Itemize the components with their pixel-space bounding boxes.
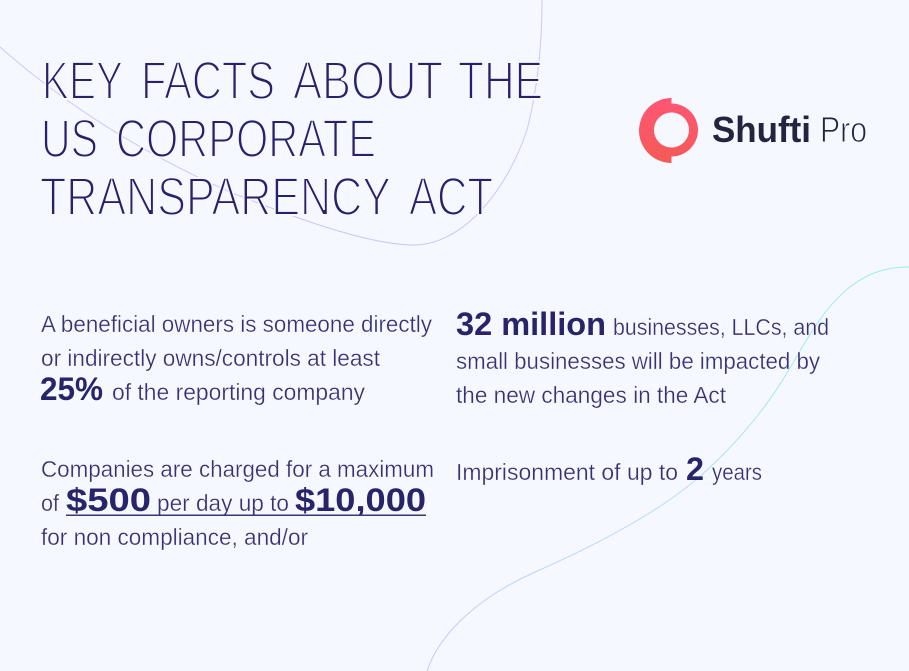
fact: fines: Companies are charged for a maximum [41,456,434,482]
icon: logo ring [639,98,698,163]
title [40,51,543,227]
fact: fines: $500 [66,482,151,518]
title: FACTS [141,51,275,111]
fact: fines: $10,000 [295,482,426,518]
fact: imprisonment: Imprisonment of up to [456,459,678,485]
fact: 32 million businesses: the new changes in the Act [456,382,727,408]
title: CORPORATE [116,109,376,169]
fact: 32 million businesses: 32 million [456,306,606,342]
title: TRANSPARENCY [40,167,391,227]
title: ABOUT [293,51,443,111]
fact: beneficial owners: 25% [40,371,103,407]
fact: 32 million businesses: small businesses will be impacted by [456,348,820,374]
fact: fines [41,456,434,550]
fact: fines: for non compliance, and/or [41,524,308,550]
fact: fines: of [41,490,60,516]
background curve: bottom right [427,267,909,671]
underline [66,514,426,516]
title: KEY [42,51,123,111]
title: THE [458,51,543,111]
logo: Shufti Pro [639,98,867,163]
fact: beneficial owners: A beneficial owners is someone directly [41,311,432,337]
logo wordmark: Shufti [712,109,811,150]
title: ACT [409,167,493,227]
fact: imprisonment: 2 [686,451,704,487]
fact: imprisonment: years [712,459,762,485]
fact: beneficial owners: of the reporting company [112,379,365,405]
fact: 32 million businesses: businesses, LLCs, and [613,314,829,340]
title: US [41,109,98,169]
fact: 32 million businesses [456,306,829,408]
fact: fines: per day up to [157,490,289,516]
fact: beneficial owners: or indirectly owns/controls at least [41,345,381,371]
fact: beneficial owners [40,311,432,407]
logo: Shufti Pro: Pro [820,109,867,150]
background curve: top [0,0,542,245]
fact: imprisonment [456,451,762,487]
